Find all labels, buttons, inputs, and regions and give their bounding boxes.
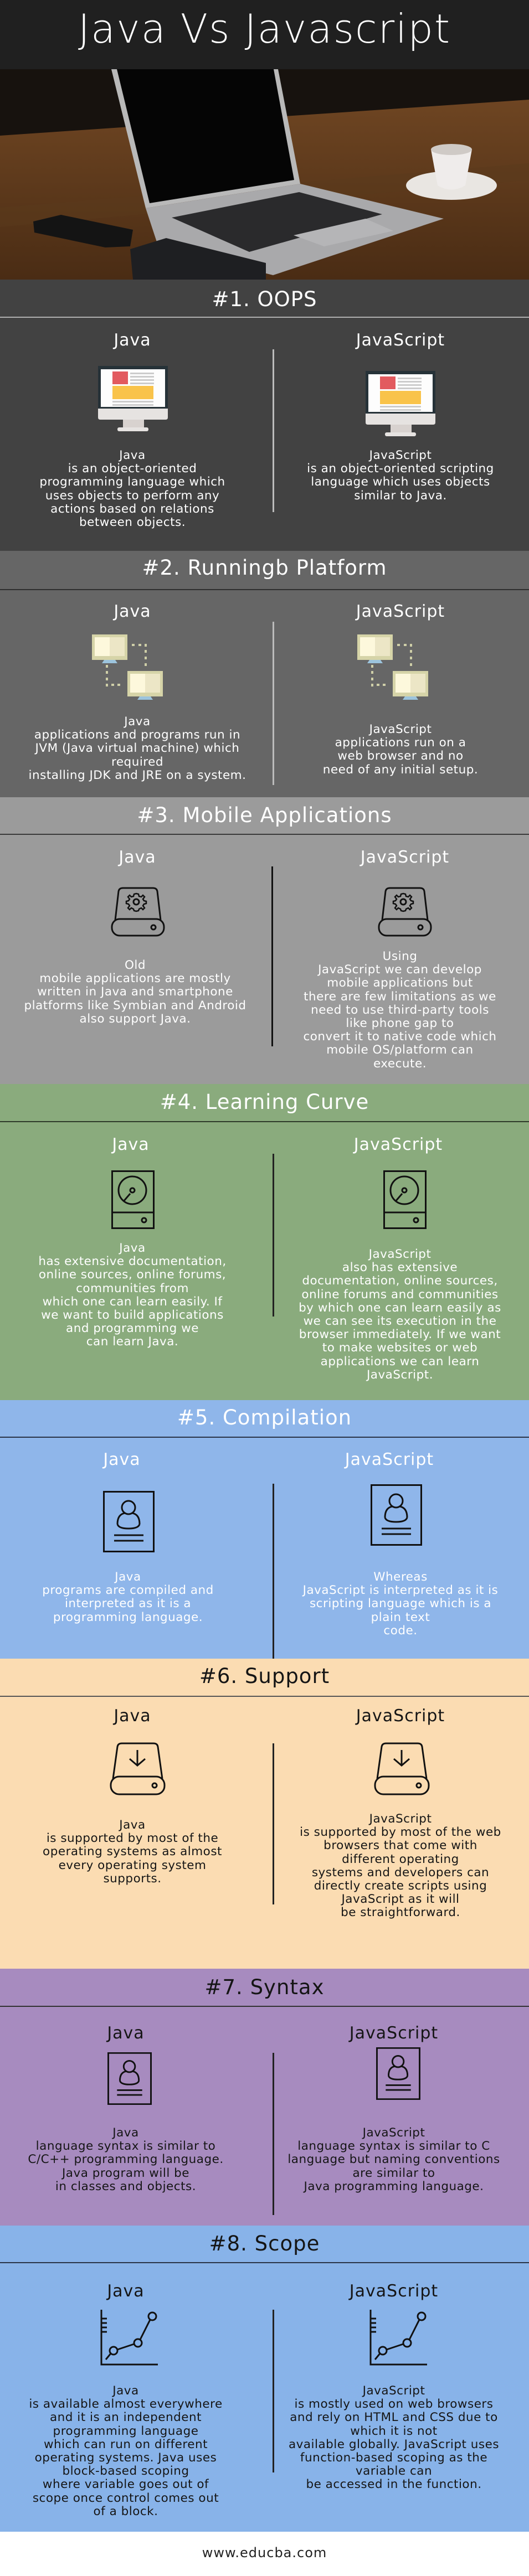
footer url: www.educba.com: [202, 2545, 327, 2560]
JavaScript column heading: JavaScript: [356, 1706, 445, 1726]
icon: profile card (JavaScript): [371, 1484, 422, 1546]
phone: [33, 215, 133, 247]
icon: profile card (Java): [107, 2052, 152, 2105]
JavaScript text: mobile OS/platform can: [326, 1043, 474, 1057]
Java text: block-based scoping: [62, 2464, 189, 2478]
Java text: programming language which: [39, 475, 225, 489]
JavaScript text: similar to Java.: [354, 489, 447, 503]
Java column heading: Java: [103, 1450, 141, 1469]
Java text: which one can learn easily. If: [43, 1295, 222, 1309]
hero photo: laptop on wooden table: [0, 69, 529, 280]
JavaScript text: and rely on HTML and CSS due to: [290, 2410, 498, 2424]
heading: #8. Scope: [209, 2232, 320, 2255]
Java text: we want to build applications: [41, 1308, 224, 1322]
JavaScript text: directly create scripts using: [314, 1879, 487, 1893]
Java text: of a block.: [94, 2505, 158, 2518]
Java text: Old: [125, 958, 146, 972]
heading: #2. Runningb Platform: [142, 556, 387, 580]
JavaScript text: JavaScript: [369, 1247, 431, 1261]
Java text: [42, 1570, 214, 1624]
Java text: [29, 2384, 223, 2518]
JavaScript text: scripting language which is a: [310, 1597, 491, 1610]
JavaScript text: language which uses objects: [311, 475, 490, 489]
Java text: [38, 1241, 227, 1349]
Java text: [28, 2126, 224, 2193]
JavaScript text: JavaScript we can develop: [318, 963, 482, 977]
JavaScript text: be straightforward.: [341, 1906, 460, 1919]
heading: #7. Syntax: [205, 1975, 324, 1999]
JavaScript text: convert it to native code which: [303, 1030, 497, 1044]
section 2: Running Platform: [0, 551, 529, 797]
section 5: Compilation: [0, 1400, 529, 1659]
Java text: Java: [119, 448, 146, 462]
JavaScript text: [300, 1812, 501, 1919]
Java text: JVM (Java virtual machine) which: [35, 741, 239, 755]
JavaScript text: JavaScript: [363, 2384, 425, 2398]
Java text: C/C++ programming language.: [28, 2152, 224, 2166]
JavaScript text: mobile applications but: [327, 976, 473, 990]
footer: [0, 2532, 529, 2576]
JavaScript text: are similar to: [352, 2166, 435, 2180]
cup: [406, 171, 497, 200]
JavaScript column heading: JavaScript: [350, 2281, 438, 2301]
JavaScript text: is mostly used on web browsers: [295, 2397, 493, 2411]
heading: #6. Support: [199, 1664, 330, 1688]
section 7: Syntax: [0, 1969, 529, 2226]
notebook: [130, 238, 266, 280]
icon: networked monitors (Java): [92, 634, 163, 700]
icon: profile card (Java): [103, 1491, 155, 1552]
icon: line chart (JavaScript): [370, 2310, 427, 2365]
Java text: required: [111, 755, 163, 769]
Java text: [29, 715, 246, 782]
JavaScript text: Java programming language.: [304, 2180, 484, 2193]
JavaScript text: systems and developers can: [312, 1866, 489, 1880]
JavaScript column heading: JavaScript: [356, 331, 445, 350]
Java text: Java: [124, 715, 151, 729]
JavaScript text: function-based scoping as the: [300, 2451, 487, 2465]
JavaScript text: we can see its execution in the: [304, 1314, 496, 1328]
JavaScript text: web browser and no: [337, 749, 464, 763]
Java column heading: Java: [119, 848, 156, 867]
Java text: written in Java and smartphone: [37, 985, 233, 999]
Java text: interpreted as it is a: [65, 1597, 191, 1610]
JavaScript text: [303, 949, 497, 1071]
section 1: OOPS: [0, 280, 529, 551]
laptop screen: [111, 69, 300, 208]
icon: download drive (Java): [110, 1743, 165, 1795]
JavaScript text: Using: [383, 949, 417, 963]
Java text: programming language.: [53, 1610, 203, 1624]
Java text: [39, 448, 225, 529]
Java text: Java: [112, 2384, 139, 2398]
JavaScript text: execute.: [373, 1057, 427, 1071]
JavaScript text: which it is not: [350, 2424, 438, 2438]
JavaScript text: plain text: [371, 1610, 430, 1624]
JavaScript text: is supported by most of the web: [300, 1825, 501, 1839]
heading: #4. Learning Curve: [160, 1090, 369, 1114]
Java text: installing JDK and JRE on a system.: [29, 768, 246, 782]
icon: hard disk (Java): [111, 1170, 155, 1229]
JavaScript text: JavaScript.: [367, 1368, 433, 1382]
JavaScript text: browser immediately. If we want: [299, 1328, 501, 1341]
JavaScript text: available globally. JavaScript uses: [289, 2438, 499, 2451]
Java text: uses objects to perform any: [45, 489, 219, 503]
JavaScript text: JavaScript: [363, 2126, 425, 2140]
JavaScript text: variable can: [356, 2464, 432, 2478]
icon: monitor (JavaScript): [366, 371, 435, 436]
Java text: between objects.: [79, 515, 186, 529]
Java text: programming language: [53, 2424, 198, 2438]
Java text: has extensive documentation,: [38, 1255, 227, 1268]
JavaScript column heading: JavaScript: [350, 2023, 438, 2043]
Java text: operating systems as almost: [43, 1845, 222, 1859]
JavaScript text: applications we can learn: [321, 1355, 479, 1369]
JavaScript text: is an object-oriented scripting: [307, 462, 494, 476]
heading: #1. OOPS: [212, 287, 317, 311]
icon: profile card (JavaScript): [376, 2047, 420, 2100]
Java text: [43, 1818, 222, 1886]
JavaScript text: JavaScript as it will: [341, 1892, 460, 1906]
section 8: Scope: [0, 2226, 529, 2532]
Java column heading: Java: [114, 331, 151, 350]
Java text: Java: [112, 2126, 139, 2140]
Java text: platforms like Symbian and Android: [24, 999, 246, 1013]
icon: download drive (JavaScript): [374, 1743, 430, 1795]
title bar: [0, 0, 529, 69]
JavaScript text: need to use third-party tools: [311, 1003, 489, 1017]
Java text: is available almost everywhere: [29, 2397, 223, 2411]
JavaScript text: [299, 1247, 501, 1382]
JavaScript text: by which one can learn easily as: [299, 1301, 501, 1315]
JavaScript text: Whereas: [373, 1570, 428, 1584]
JavaScript text: JavaScript is interpreted as it is: [303, 1583, 498, 1597]
icon: monitor (Java): [98, 366, 168, 431]
section 6: Support: [0, 1659, 529, 1969]
Java text: communities from: [76, 1282, 189, 1295]
JavaScript text: different operating: [342, 1852, 459, 1866]
Java text: scope once control comes out: [33, 2491, 219, 2505]
JavaScript text: online forums and communities: [301, 1288, 499, 1302]
title: Java Vs Javascript: [78, 6, 451, 52]
Java text: programs are compiled and: [42, 1583, 214, 1597]
Java text: in classes and objects.: [55, 2180, 196, 2193]
JavaScript text: [323, 722, 478, 777]
JavaScript text: language syntax is similar to C: [297, 2139, 490, 2153]
Java text: Java: [119, 1818, 146, 1832]
JavaScript column heading: JavaScript: [354, 1135, 443, 1154]
icon: line chart (Java): [101, 2310, 158, 2365]
Java text: Java: [115, 1570, 141, 1584]
laptop base: [146, 184, 444, 275]
Java text: actions based on relations: [50, 502, 214, 516]
JavaScript text: applications run on a: [335, 736, 466, 750]
JavaScript text: be accessed in the function.: [306, 2477, 482, 2491]
JavaScript text: code.: [383, 1624, 418, 1638]
Java text: online sources, online forums,: [39, 1268, 226, 1282]
Java text: also support Java.: [80, 1012, 191, 1026]
Java column heading: Java: [107, 2023, 145, 2043]
JavaScript column heading: JavaScript: [356, 602, 445, 621]
Java text: Java program will be: [62, 2166, 189, 2180]
heading: #5. Compilation: [177, 1406, 352, 1429]
JavaScript text: need of any initial setup.: [323, 763, 478, 777]
heading: #3. Mobile Applications: [137, 803, 392, 827]
Java text: mobile applications are mostly: [39, 972, 231, 985]
Java text: every operating system: [59, 1859, 206, 1872]
Java column heading: Java: [112, 1135, 150, 1154]
Java text: language syntax is similar to: [36, 2139, 215, 2153]
Java text: operating systems. Java uses: [35, 2451, 217, 2465]
JavaScript column heading: JavaScript: [361, 848, 449, 867]
section 4: Learning Curve: [0, 1084, 529, 1400]
JavaScript text: browsers that come with: [323, 1839, 477, 1852]
Java text: [24, 958, 246, 1026]
JavaScript text: [287, 2126, 500, 2193]
icon: networked monitors (JavaScript): [357, 634, 428, 700]
section 3: Mobile Applications: [0, 797, 529, 1084]
icon: gear drive (JavaScript): [378, 887, 432, 937]
Java text: is an object-oriented: [68, 462, 197, 476]
JavaScript text: there are few limitations as we: [304, 990, 496, 1004]
Java text: supports.: [103, 1872, 162, 1886]
Java text: which can run on different: [44, 2438, 208, 2451]
Java text: can learn Java.: [86, 1335, 178, 1349]
JavaScript text: also has extensive: [342, 1261, 458, 1274]
JavaScript text: JavaScript: [369, 448, 432, 462]
Java text: is supported by most of the: [47, 1831, 218, 1845]
icon: gear drive (Java): [111, 887, 165, 937]
JavaScript text: to make websites or web: [322, 1341, 477, 1355]
Java text: where variable goes out of: [43, 2477, 209, 2491]
JavaScript text: [302, 1570, 498, 1638]
JavaScript text: like phone gap to: [346, 1016, 454, 1030]
Java text: applications and programs run in: [34, 728, 240, 742]
Java text: and programming we: [66, 1321, 199, 1335]
Java column heading: Java: [114, 1706, 151, 1726]
JavaScript column heading: JavaScript: [345, 1450, 434, 1469]
JavaScript text: [289, 2384, 499, 2491]
JavaScript text: JavaScript: [369, 722, 432, 736]
JavaScript text: JavaScript: [369, 1812, 432, 1826]
Java text: Java: [119, 1241, 146, 1255]
Java column heading: Java: [107, 2281, 145, 2301]
icon: hard disk (JavaScript): [383, 1170, 427, 1229]
Java text: and it is an independent: [50, 2410, 202, 2424]
Java column heading: Java: [114, 602, 151, 621]
JavaScript text: [307, 448, 494, 503]
JavaScript text: documentation, online sources,: [302, 1274, 498, 1288]
JavaScript text: language but naming conventions: [287, 2152, 500, 2166]
